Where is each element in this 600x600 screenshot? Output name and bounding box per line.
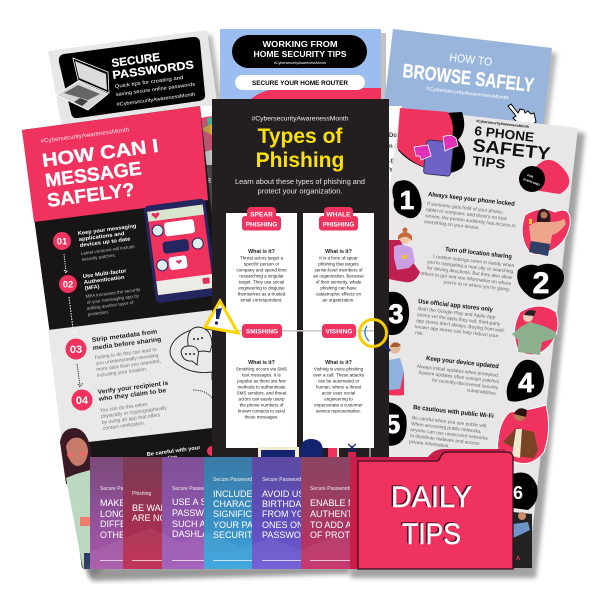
tip card: use a secure password manager	[162, 457, 238, 569]
spear phishing text: specific person or	[244, 262, 280, 266]
step 04: who they claim to be	[97, 387, 167, 403]
card: 6 phone safety tips: n a	[389, 144, 398, 150]
step 04: by using an app that offers	[101, 412, 161, 426]
card: 6 phone safety tips: Do	[389, 133, 397, 139]
spear phishing text: engineering to disguise	[238, 286, 285, 290]
vishing text	[313, 360, 365, 414]
vishing text: Vishing is voice-phishing	[314, 366, 364, 372]
badge: whale phishing	[319, 207, 358, 230]
vishing text: can be automated or	[318, 378, 360, 384]
badge: spear phishing: PHISHING	[246, 222, 277, 228]
smishing text: Smishing occurs via SMS	[236, 366, 287, 372]
step 01	[53, 223, 137, 262]
panel: right column	[303, 213, 374, 448]
step 01: Keep your messaging	[77, 223, 137, 237]
tip 2: 2	[533, 267, 549, 300]
tip 3: risk.	[415, 330, 424, 337]
tip card: be wary: ARE NOT	[132, 513, 173, 523]
header panel: MESSAGE	[44, 158, 143, 192]
heading: secure passwords: Quick tips for creating and	[114, 75, 184, 90]
tip card: use a secure password manager: USE A SECURE	[172, 497, 238, 507]
tip 1: If someone gets hold of your phone,	[427, 201, 504, 216]
heading: secure passwords	[111, 52, 196, 108]
card: secure passwords	[48, 30, 224, 128]
badge: smishing: SMISHING	[246, 328, 278, 336]
smishing text: SMS senders, and threat	[237, 390, 287, 396]
tip card: include special characters: INCLUDE SPECIAL	[213, 489, 293, 499]
heading: 6 phone safety tips	[472, 119, 551, 172]
intro: Learn about these types of phishing and	[235, 179, 365, 186]
step 03	[66, 328, 162, 379]
tip card: make long passwords: OTHERS	[100, 530, 138, 540]
smishing text: What is it?	[248, 360, 275, 366]
card: types of phishing	[205, 99, 390, 464]
folder label: DAILY	[390, 480, 470, 513]
title: Types of	[257, 125, 342, 148]
tip 4	[416, 355, 544, 402]
card: how can I message safely	[22, 106, 240, 578]
tip card: be wary: BE WARY OF	[132, 503, 188, 513]
tip 6	[513, 472, 538, 568]
tip 3: 3	[388, 299, 404, 329]
whale phishing text	[313, 249, 364, 302]
tip card: include special characters: YOUR PASSWORD	[213, 520, 294, 530]
step 03: you unintentionally revealing	[95, 353, 159, 367]
tip card: avoid using birthdates: AVOID USING	[262, 489, 320, 499]
tip 3: app stores don't always. Buying from well-	[416, 318, 506, 334]
light panel	[48, 310, 212, 445]
card: how to browse safely: BROWSE SAFELY	[401, 60, 535, 97]
tip card: avoid using birthdates: ONES ON	[262, 520, 304, 530]
shadow under tip strip	[84, 566, 350, 581]
tip card: avoid using birthdates: BIRTHDATES	[262, 499, 318, 509]
step 03: more data than you intended,	[96, 359, 161, 373]
tip card: make long passwords	[90, 457, 153, 569]
step 02: protection.	[87, 309, 109, 317]
tip 1: screen, the person suddenly has access to	[425, 213, 516, 229]
hashtag: #CybersecurityAwarenessMonth	[252, 116, 349, 122]
tip 4: Always install updates when prompted.	[416, 364, 499, 379]
tip card: make long passwords: Secure Passwords	[100, 486, 142, 492]
whale phishing text: catastrophic effects on	[316, 292, 361, 296]
tip 3	[385, 292, 506, 340]
tip card: be wary: Phishing	[132, 491, 151, 497]
tip 1: 1	[400, 185, 414, 215]
step 03: Strip metadata from	[91, 328, 158, 344]
step 02: (MFA)	[84, 284, 100, 292]
card: how to browse safely	[383, 29, 557, 132]
whale phishing text: an organization. Because	[313, 274, 364, 278]
header panel	[22, 106, 208, 222]
divider row	[226, 330, 374, 332]
illustration: woman with ginger hair	[385, 228, 420, 282]
spear phishing text: target. They use social	[239, 280, 284, 284]
step 01: security patches.	[81, 253, 116, 262]
backing sheet behind left card	[198, 106, 214, 460]
tip 5: private information.	[409, 439, 450, 450]
tip card: use a secure password manager: Secure Passwords	[172, 486, 214, 492]
vishing text: impersonate a customer	[314, 402, 363, 408]
title: Types of	[258, 125, 343, 148]
smishing text: popular as there are few	[237, 378, 287, 384]
heading: secure passwords: saving secure online passwords	[115, 82, 196, 98]
tip card: enable multi-factor authentication: ENABLE MULTI	[310, 498, 374, 508]
vishing text: engineering to	[324, 396, 353, 402]
tip 2: for driving directions. But they also allow	[427, 265, 513, 281]
step 02: of your messaging app by	[86, 293, 140, 305]
heading: secure passwords: PASSWORDS	[112, 59, 195, 82]
tip card: use a secure password manager: SUCH AS	[172, 519, 212, 529]
daily tips card strip	[90, 457, 390, 569]
tip 1: everything on your device.	[424, 219, 480, 231]
tip card: use a secure password manager: PASSWORD	[172, 508, 224, 518]
heading: 6 phone safety tips: #CybersecurityAwarenessMonth	[476, 119, 530, 129]
heading blobs	[398, 112, 465, 173]
spear phishing text: researching a singular	[239, 274, 284, 278]
step 04: 04	[76, 395, 89, 407]
tip card: include special characters: CHARACTERS	[213, 499, 275, 509]
card: how to browse safely: #CybersecurityAwarenessMonth	[426, 86, 509, 101]
step 02: 02	[63, 280, 73, 290]
spear phishing text: themselves as a trusted	[238, 292, 286, 296]
step 01: 01	[57, 236, 68, 248]
tip 4: vulnerabilities.	[467, 388, 497, 397]
folder: daily tips	[350, 449, 513, 569]
tip 3: stores vet the apps they sell; third-party	[417, 312, 501, 328]
tip card: avoid using birthdates: PASSWORDS	[262, 530, 320, 540]
icon: phone with chat	[143, 198, 218, 303]
illustration: man in blue, hand to chin	[389, 342, 404, 396]
tip 4: System updates often contain patches	[418, 370, 500, 385]
tip 2: you're navigating a new city or searching	[427, 259, 514, 275]
card: how to browse safely: HOW TO	[449, 52, 493, 69]
footer note	[146, 445, 201, 464]
spear phishing text: email correspondent.	[240, 298, 283, 302]
header panel: #CybersecurityAwarenessMonth	[40, 127, 129, 145]
tip 1: Always keep your phone locked	[428, 191, 515, 208]
backing sheet behind left card: R	[206, 178, 211, 185]
title: Phishing	[255, 149, 343, 172]
vishing text: actor uses social	[322, 390, 355, 396]
step 02: Authentication	[83, 275, 125, 286]
smishing text: methods to authenticate	[237, 384, 286, 390]
whale phishing text: phishing can have	[320, 286, 357, 290]
smishing text: known contacts to send	[238, 408, 286, 414]
card: home router tips: WORKING FROM	[262, 40, 338, 49]
tip card: include special characters: SIGNIFICANTLY	[213, 509, 280, 519]
tip card: enable multi-factor authentication: OF PROTECTION	[310, 530, 384, 540]
badge: for everyone: FOR	[527, 173, 535, 179]
step 03: 03	[70, 344, 82, 356]
tip 5: anyone can use unsecured networks	[410, 427, 489, 442]
step 03: media before sharing	[92, 336, 162, 352]
tip 3: Both the Google Play and Apple App	[418, 306, 496, 321]
tip card: enable multi-factor authentication: TO ADD ANOTHER	[310, 520, 390, 530]
tip 2	[420, 246, 564, 300]
tip 3: known app stores can help reduce your	[415, 324, 499, 340]
badge: whale phishing: PHISHING	[323, 222, 354, 228]
card: home router tips: #CybersecurityAwarenessMonth	[274, 61, 326, 65]
step 04: contact verification.	[102, 420, 146, 432]
whale phishing text: What is it?	[325, 249, 352, 255]
badge: smishing	[242, 324, 282, 338]
step 04: You can do this either	[99, 402, 148, 414]
whale phishing text: It is a form of spear	[319, 256, 358, 260]
step 02: Use Multi-factor	[82, 268, 127, 280]
step 02: adding another layer of	[86, 300, 134, 311]
spear phishing text: Threat actors target a	[240, 256, 284, 260]
badge: vishing: VISHING	[326, 328, 352, 336]
icon: pointer hand	[508, 104, 536, 126]
tip card: enable multi-factor authentication: AUTHENTICATION	[310, 509, 388, 519]
whale phishing text: of their seniority, whale	[316, 280, 362, 284]
heading: 6 phone safety tips: SAFETY	[472, 135, 551, 164]
tip 5: Be careful when you use public wifi.	[412, 415, 488, 430]
vishing text: over a call. These attacks	[313, 372, 365, 378]
step 04: physically or cryptographically	[100, 405, 168, 420]
tip card: make long passwords: DIFFERENT	[100, 519, 151, 529]
illustration: man in brown jacket	[498, 405, 549, 464]
badge: for everyone	[519, 166, 545, 192]
heading: secure passwords: SECURE	[111, 52, 161, 70]
step 01: applications and	[78, 231, 125, 243]
step 02	[59, 268, 141, 317]
folder label	[390, 480, 472, 551]
step 03: including your location.	[96, 366, 148, 379]
title	[255, 125, 344, 172]
tip card: include special characters	[204, 457, 294, 569]
intro: protect your organization.	[258, 188, 343, 196]
tip 5	[385, 402, 494, 450]
folder label: DAILY	[391, 481, 472, 514]
footer note: Be careful with your	[146, 445, 201, 458]
tip card: enable multi-factor authentication: Secure Passwords	[310, 486, 352, 492]
tip 5: When accessing public networks,	[411, 421, 482, 435]
tip card: be wary	[123, 457, 188, 569]
tip 4: Keep your device updated	[426, 355, 499, 370]
whale phishing text: phishing that targets	[318, 262, 360, 266]
card: 6 phone safety tips	[340, 106, 585, 578]
heading: secure passwords: #CybersecurityAwarenessMonth	[116, 92, 196, 108]
heading: 6 phone safety tips: TIPS	[472, 153, 507, 172]
decorative scene at foot of card	[258, 439, 371, 459]
spear phishing text: What is it?	[248, 249, 275, 255]
tip card: make long passwords: MAKE SURE	[100, 498, 153, 508]
tip card: enable multi-factor authentication	[301, 457, 390, 569]
badge: whale phishing: WHALE	[326, 212, 351, 218]
card: home router tips: HOME SECURITY TIPS	[254, 50, 347, 59]
arrow: 02 to 03	[69, 297, 77, 333]
tip 2: Location settings come in handy when	[433, 254, 515, 269]
smishing text: these messages.	[244, 414, 279, 420]
icon: phone with speech bubbles	[414, 135, 458, 176]
folder label: TIPS	[400, 517, 460, 550]
tip 6: A	[516, 556, 521, 562]
illustration: woman	[60, 428, 92, 569]
header panel: HOW CAN I	[41, 136, 160, 172]
card: home router tips: SECURE YOUR HOME ROUTER	[252, 80, 348, 87]
icon: laptop	[56, 58, 109, 110]
tip 5: 5	[386, 409, 400, 439]
tip 2: Turn off location sharing	[445, 246, 512, 261]
card: 6 phone safety tips: Yah	[389, 168, 400, 174]
tip card: include special characters: SECURITY.	[213, 530, 260, 540]
icon: magnifying glass	[360, 320, 390, 351]
whale phishing text: senior-level members of	[314, 268, 363, 272]
header panel: SAFELY?	[46, 180, 136, 212]
tip 2: you're at or where you're going.	[443, 279, 510, 293]
tip 4: for recently-discovered security	[432, 378, 499, 391]
step 04	[72, 380, 169, 432]
vishing text: What is it?	[325, 360, 352, 366]
title: Phishing	[256, 149, 344, 172]
intro	[235, 179, 365, 196]
tip 4: 4	[518, 367, 534, 398]
step 04: Verify your recipient is	[97, 380, 169, 396]
step 02: MFA increases the security	[85, 287, 141, 299]
badge: for everyone: EVERYONE!	[523, 177, 541, 187]
badge: spear phishing	[242, 207, 281, 230]
panel: left column	[226, 213, 297, 448]
spear phishing text: company and spend time	[236, 268, 287, 272]
smishing text: actors can easily usurp	[238, 396, 285, 402]
icon: warning triangle	[205, 301, 238, 333]
tip 2: others to get and see information on where	[420, 271, 512, 287]
whale phishing text: an organization.	[322, 298, 355, 302]
badge: spear phishing: SPEAR	[250, 212, 273, 218]
illustration: woman in pink top	[522, 209, 570, 256]
card: home router tips	[220, 29, 386, 109]
spear phishing text	[236, 249, 287, 302]
folder label: TIPS	[402, 518, 461, 551]
tip 1: tablet or computer, and there's no lock	[426, 207, 508, 222]
icon: speech bubbles	[170, 327, 212, 398]
badge: vishing	[322, 324, 356, 338]
tip card: avoid using birthdates	[252, 457, 320, 569]
smishing text	[236, 360, 287, 420]
tip card: avoid using birthdates: Secure Passwords	[262, 477, 304, 483]
tip card: include special characters: Secure Passwords	[213, 477, 255, 483]
tip card: use a secure password manager: DASHLANE	[172, 529, 221, 539]
card: 6 phone safety tips: .g	[389, 158, 395, 164]
tip card: make long passwords: LONG AND	[100, 509, 147, 519]
vishing text: human, where a threat	[316, 384, 362, 390]
illustration: man in green	[512, 306, 558, 355]
heading: 6 phone safety tips: 6 PHONE	[474, 123, 535, 145]
tip 3: Use official app stores only	[418, 298, 494, 314]
tip 6: 6	[513, 483, 523, 503]
tip 5: to distribute malware and access	[410, 433, 480, 447]
footer note: information	[148, 454, 178, 464]
tip card: avoid using birthdates: FROM YOUR	[262, 509, 317, 519]
tip 1	[392, 180, 516, 231]
step 03: Failing to do this can lead to	[94, 347, 157, 361]
arrow: 01 to 02	[64, 254, 68, 273]
arrow: 03 to 04	[77, 364, 83, 387]
tip 5: Be cautious with public Wi-Fi	[413, 404, 494, 420]
vishing text: service representative.	[316, 408, 361, 414]
smishing text: the phone numbers of	[240, 402, 284, 408]
step 01: devices up to date	[79, 236, 131, 249]
step 01: Latest versions will include	[80, 244, 135, 256]
smishing text: text messages. It is	[242, 372, 282, 378]
